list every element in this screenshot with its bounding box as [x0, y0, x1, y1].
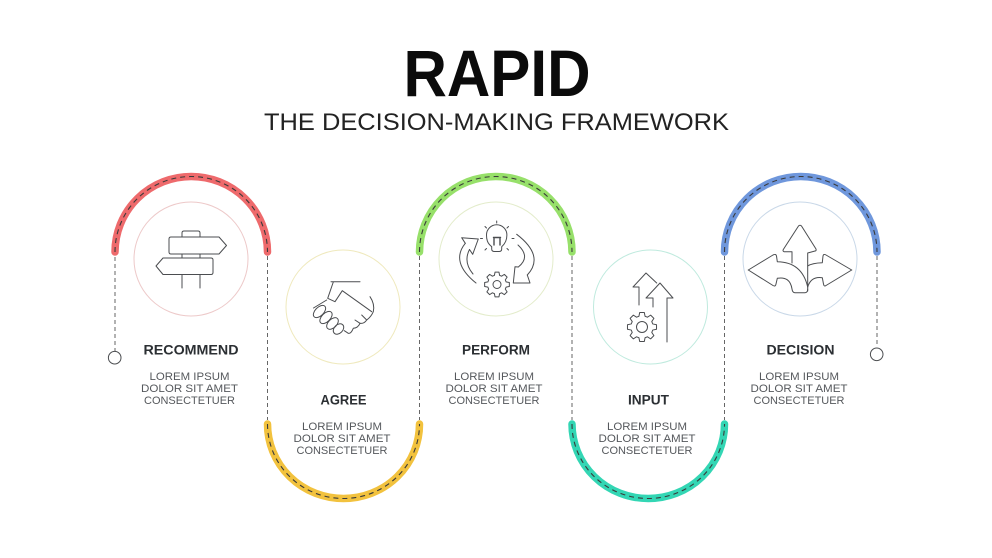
agree ring	[286, 250, 400, 364]
recommend text	[141, 371, 238, 407]
panel: recommend	[115, 176, 268, 407]
icon: arrows and gear	[627, 273, 673, 342]
panel: perform	[420, 176, 572, 407]
perform text: DOLOR SIT AMET	[446, 383, 543, 395]
input text: LOREM IPSUM	[607, 421, 687, 433]
perform text: LOREM IPSUM	[454, 371, 534, 383]
agree heading: AGREE	[320, 392, 366, 408]
recommend text: DOLOR SIT AMET	[141, 383, 238, 395]
decision text: CONSECTETUER	[754, 395, 845, 407]
subtitle: THE DECISION-MAKING FRAMEWORK	[264, 109, 729, 136]
decision text: DOLOR SIT AMET	[750, 383, 848, 395]
input text	[598, 421, 696, 457]
connector: start line with end dot	[108, 257, 121, 364]
recommend text: CONSECTETUER	[144, 395, 235, 407]
icon: three-way arrows	[748, 225, 852, 293]
icon: handshake	[311, 282, 374, 336]
input text: CONSECTETUER	[602, 445, 693, 457]
panel: agree	[268, 250, 420, 498]
blue arc	[724, 176, 877, 252]
input heading: INPUT	[628, 392, 670, 408]
decision text: LOREM IPSUM	[759, 371, 839, 383]
teal arc	[572, 424, 724, 498]
red arc	[115, 176, 268, 252]
perform text	[446, 371, 543, 407]
panel: decision	[724, 176, 877, 407]
perform heading: PERFORM	[462, 342, 530, 358]
recommend heading: RECOMMEND	[144, 342, 239, 358]
green arc	[420, 176, 572, 252]
agree text: LOREM IPSUM	[302, 421, 382, 433]
icon: signpost	[156, 231, 226, 288]
title: RAPID	[404, 36, 590, 110]
agree text: CONSECTETUER	[296, 445, 388, 457]
perform ring	[439, 202, 553, 316]
agree text	[294, 421, 391, 457]
panel: input	[572, 250, 724, 498]
perform text: CONSECTETUER	[448, 395, 540, 407]
agree text: DOLOR SIT AMET	[294, 433, 391, 445]
connector: end line with end dot	[870, 256, 883, 361]
decision text	[750, 371, 848, 407]
input text: DOLOR SIT AMET	[598, 433, 696, 445]
decision heading: DECISION	[766, 342, 834, 358]
yellow arc	[268, 424, 420, 498]
decision ring	[743, 202, 857, 316]
recommend text: LOREM IPSUM	[150, 371, 230, 383]
recommend ring	[134, 202, 248, 316]
connector: vertical dashed lines between arcs	[268, 256, 724, 420]
input ring	[594, 250, 708, 364]
icon: bulb, cycle arrows and gear	[460, 221, 534, 297]
